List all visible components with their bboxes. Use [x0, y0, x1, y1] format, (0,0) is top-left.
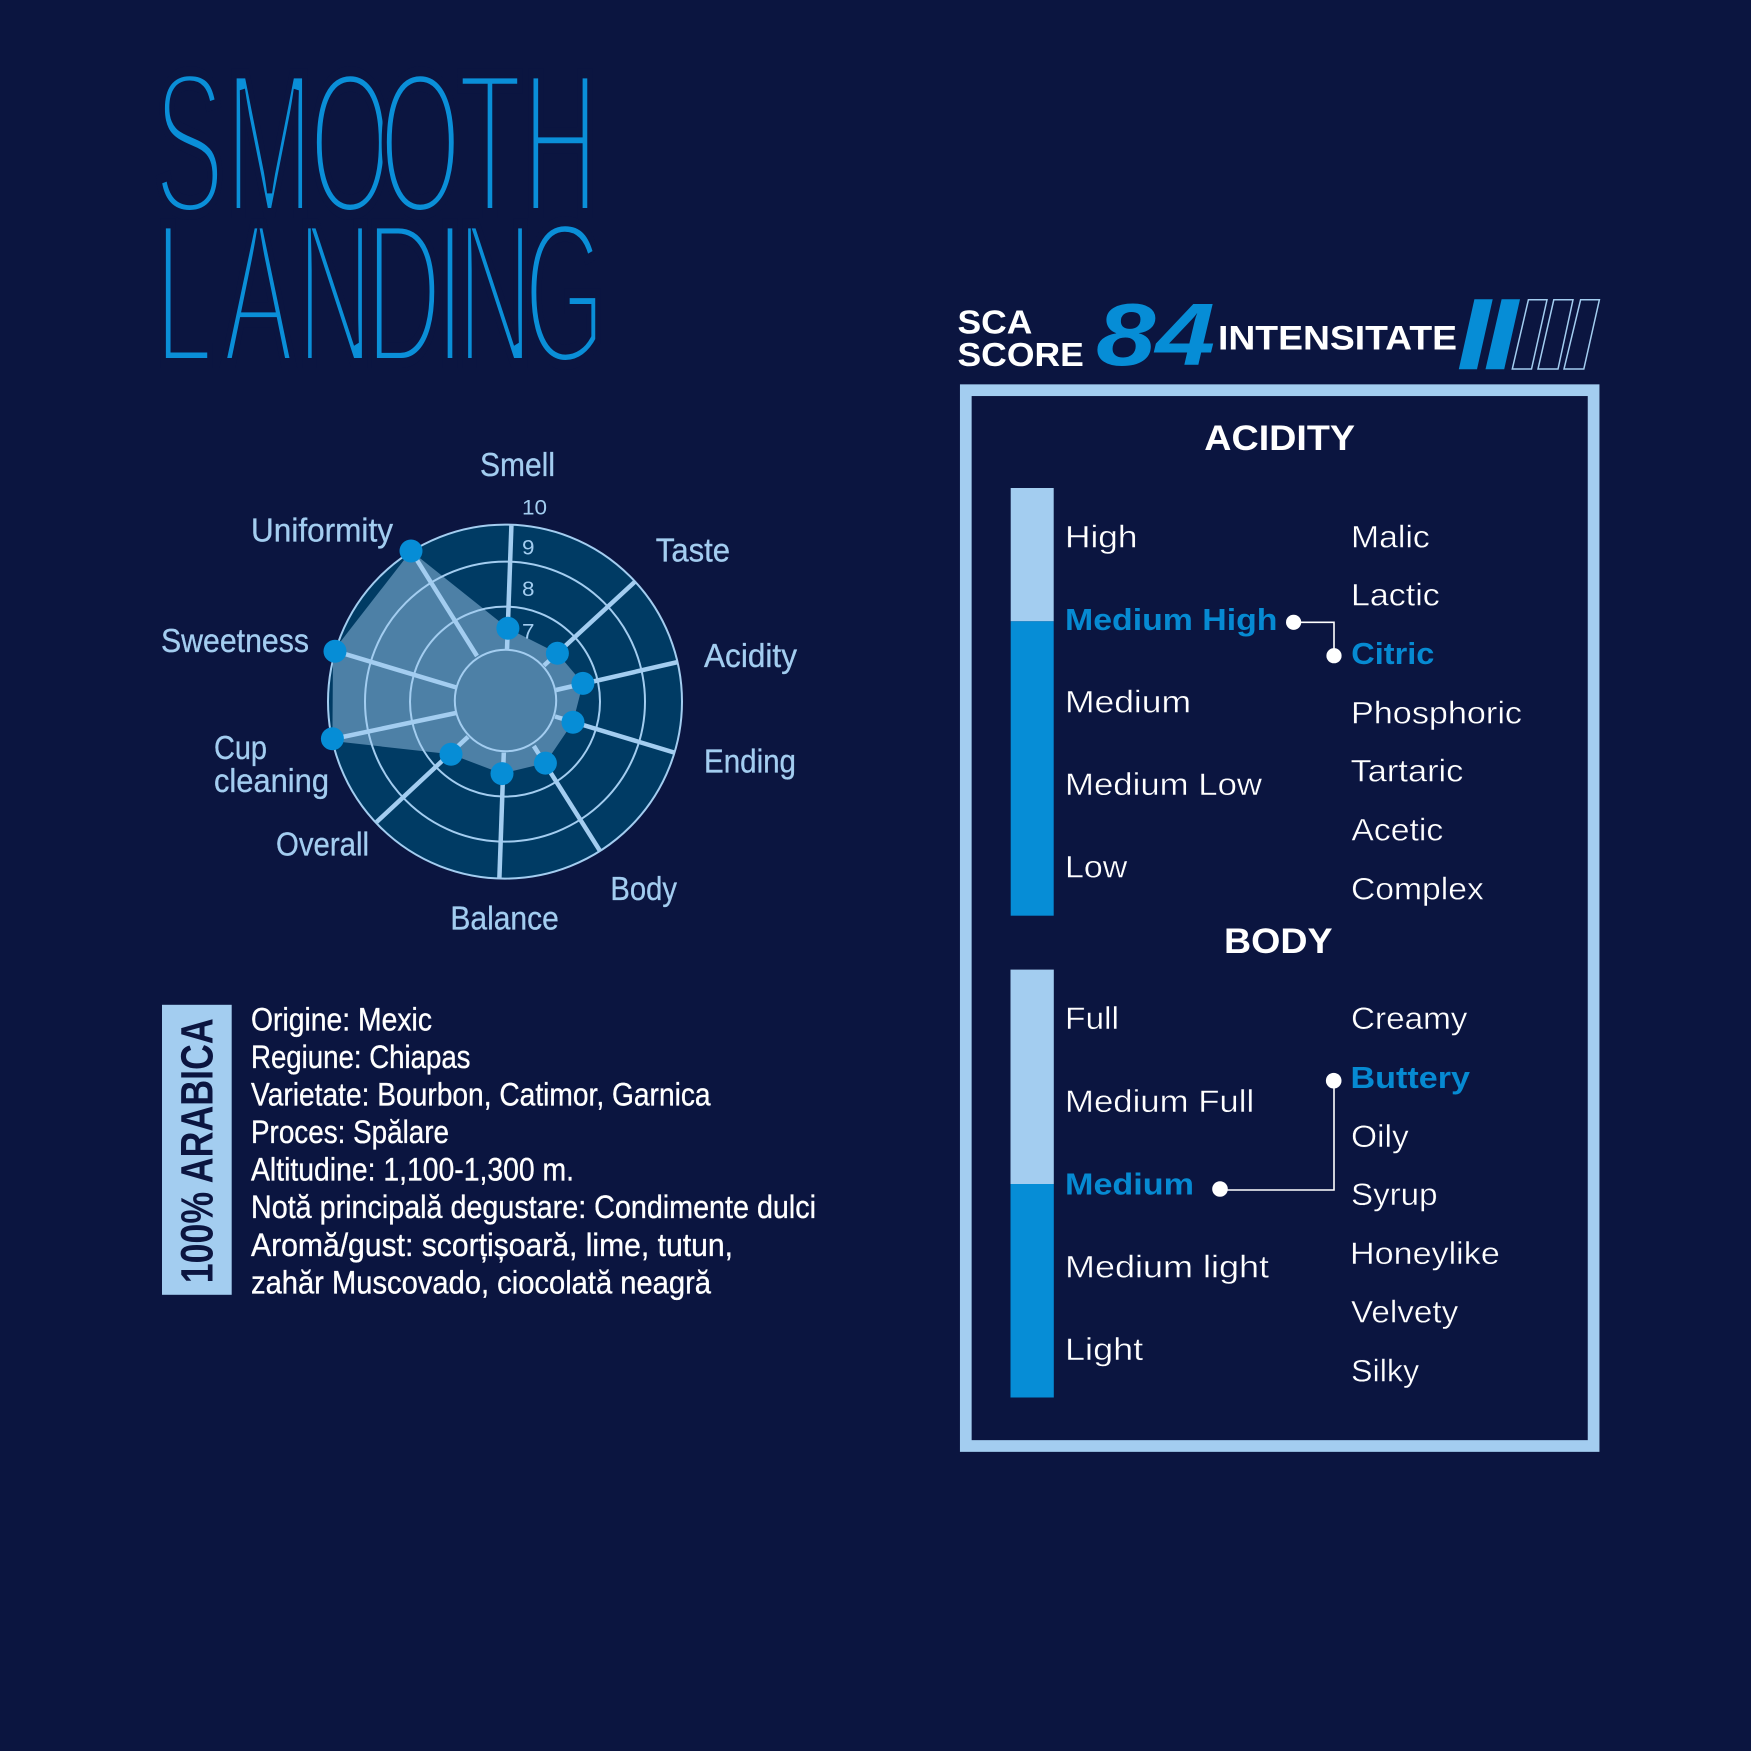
radar axis labels: Smell — [480, 446, 555, 483]
radar axis labels: Taste — [656, 531, 730, 568]
body type labels: Silky — [1351, 1353, 1419, 1389]
radar axis labels: Sweetness — [161, 622, 309, 659]
acidity type labels: Malic — [1351, 518, 1430, 554]
radar axis labels: Balance — [450, 900, 559, 937]
acidity level bar — [1011, 488, 1054, 916]
acidity type labels: Complex — [1351, 870, 1484, 906]
sca score: 84 — [1096, 285, 1215, 384]
origin details text: Aromă/gust: scorțișoară, lime, tutun, — [251, 1227, 733, 1263]
badge: 100% arabica — [162, 1005, 232, 1295]
radar spokes — [333, 526, 678, 878]
badge: 100% arabica: 100% ARABICA — [172, 1018, 222, 1283]
body connector — [1212, 1073, 1341, 1197]
body level labels: Medium light — [1065, 1248, 1269, 1284]
radar data points — [321, 540, 594, 785]
title: SMOOTH — [154, 31, 598, 257]
body type labels: Buttery — [1350, 1060, 1471, 1095]
body type labels: Syrup — [1351, 1176, 1438, 1212]
radar scale numbers — [522, 496, 547, 643]
body level labels: Light — [1065, 1331, 1143, 1367]
origin details text: zahăr Muscovado, ciocolată neagră — [251, 1265, 712, 1301]
radar axis labels: Acidity — [704, 637, 797, 674]
origin details text: Altitudine: 1,100-1,300 m. — [251, 1152, 574, 1188]
body type labels: Honeylike — [1350, 1235, 1500, 1271]
body type labels — [1350, 1000, 1500, 1389]
panel: acidity and body frame — [966, 390, 1594, 1446]
acidity type labels: Tartaric — [1351, 753, 1463, 789]
body level bar — [1010, 970, 1054, 1398]
origin details text: Origine: Mexic — [251, 1002, 432, 1038]
acidity connector — [1286, 615, 1342, 663]
radar axis labels: Uniformity — [251, 511, 393, 548]
radar axis labels: Overall — [276, 825, 369, 862]
body type labels: Velvety — [1351, 1294, 1459, 1330]
title — [154, 31, 606, 407]
acidity type labels: Acetic — [1351, 812, 1443, 848]
panel: coffee details — [162, 1002, 816, 1301]
body level labels: Medium — [1065, 1166, 1194, 1202]
sca score — [958, 285, 1215, 384]
acidity type labels: Citric — [1351, 636, 1434, 671]
radar axis labels: Body — [610, 870, 677, 907]
acidity type labels: Lactic — [1351, 577, 1440, 613]
heading: acidity: ACIDITY — [1204, 419, 1355, 458]
body level labels: Medium Full — [1065, 1083, 1254, 1119]
body type labels: Oily — [1351, 1118, 1409, 1154]
acidity level labels: Medium High — [1065, 602, 1278, 637]
sca score: SCA — [958, 304, 1032, 341]
radar axis labels: Cup — [214, 729, 267, 766]
radar axis labels: cleaning — [214, 762, 329, 799]
origin details text: Notă principală degustare: Condimente dulci — [251, 1189, 816, 1225]
radar chart — [161, 446, 797, 937]
body level labels: Full — [1065, 1000, 1119, 1036]
acidity level labels — [1065, 519, 1278, 885]
sca score: SCORE — [958, 337, 1084, 374]
intensity meter — [1218, 299, 1599, 369]
origin details text: Proces: Spălare — [251, 1114, 449, 1150]
acidity type labels — [1351, 518, 1522, 906]
radar scale numbers: 10 — [522, 496, 547, 520]
title: LANDING — [155, 181, 606, 407]
radar axis labels: Ending — [704, 742, 796, 780]
radar data polygon — [332, 551, 583, 774]
radar scale numbers: 9 — [522, 536, 534, 559]
radar scale numbers: 8 — [522, 578, 534, 601]
acidity level labels: High — [1065, 519, 1138, 555]
acidity type labels: Phosphoric — [1351, 694, 1522, 730]
origin details text: Regiune: Chiapas — [251, 1039, 470, 1075]
radar disc — [328, 525, 682, 879]
heading: body: BODY — [1224, 922, 1332, 961]
origin details text — [251, 1002, 816, 1301]
acidity level labels: Medium Low — [1065, 766, 1262, 802]
body level labels — [1065, 1000, 1269, 1367]
radar scale numbers: 7 — [522, 620, 534, 643]
acidity level labels: Medium — [1065, 683, 1191, 719]
origin details text: Varietate: Bourbon, Catimor, Garnica — [251, 1076, 711, 1112]
intensity meter: INTENSITATE — [1218, 319, 1457, 357]
body type labels: Creamy — [1351, 1000, 1468, 1036]
radar axis labels — [161, 446, 797, 937]
acidity level labels: Low — [1065, 849, 1128, 885]
radar rings — [365, 562, 645, 842]
